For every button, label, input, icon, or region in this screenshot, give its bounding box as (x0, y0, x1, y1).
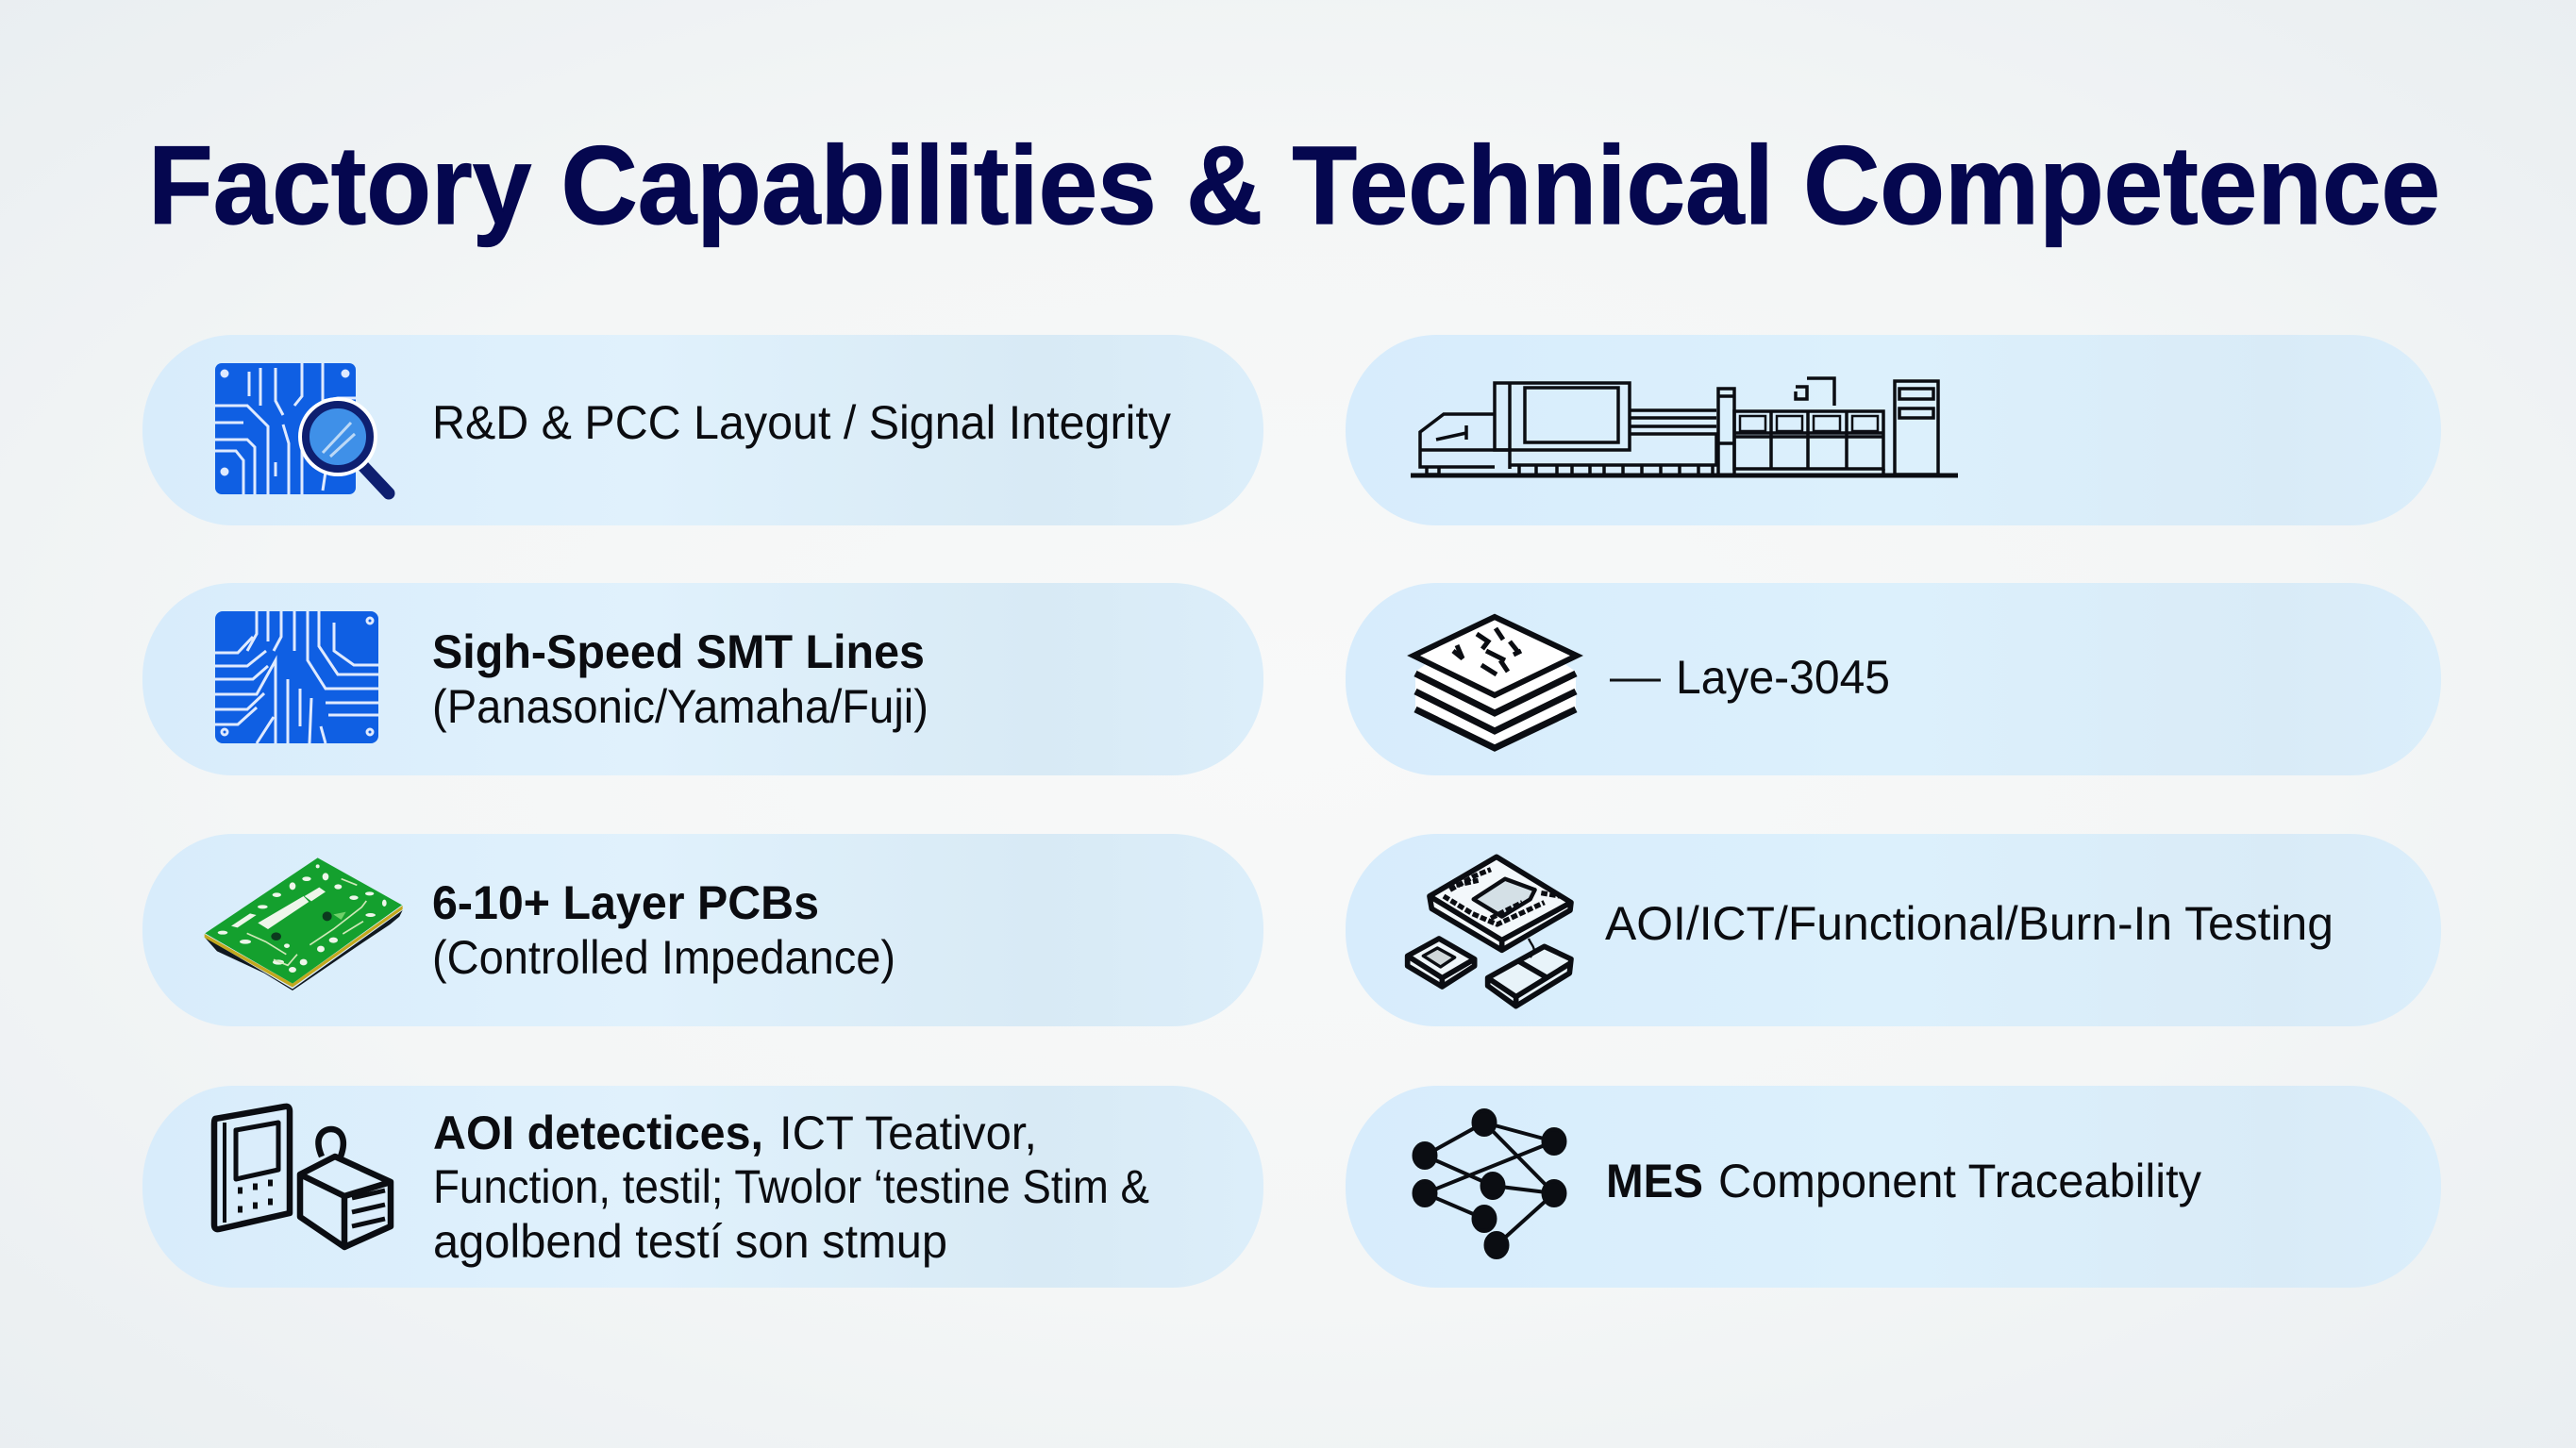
icon: circuit board (215, 611, 378, 743)
text: MES label: MES (1606, 1155, 1703, 1207)
text: SMT brands: (Panasonic/Yamaha/Fuji) (432, 680, 928, 733)
text: SMT heading: Sigh-Speed SMT Lines (432, 625, 925, 678)
text: AOI line 3: agolbend testí son stmup (433, 1215, 947, 1268)
panel: SMT lines (142, 583, 1263, 775)
text: AOI line 1: AOI detectices, (433, 1107, 763, 1159)
text: PCB heading: 6-10+ Layer PCBs (432, 876, 819, 929)
panel: layer stack (1346, 583, 2441, 775)
icon: circuit board with magnifier (215, 363, 389, 494)
text: AOI line 1: ICT Teativor, (779, 1107, 1037, 1159)
icon: green PCB (205, 857, 403, 990)
panel: AOI detection (142, 1086, 1263, 1288)
panel: MES traceability (1346, 1086, 2441, 1288)
panel: testing (1346, 834, 2441, 1026)
text: MES label: Component Traceability (1718, 1155, 2201, 1207)
text: R&D line: R&D & PCC Layout / Signal Integrity (432, 396, 1171, 449)
dash before label (1610, 679, 1661, 681)
icon: factory line (1411, 378, 1958, 475)
text: PCB note: (Controlled Impedance) (432, 931, 895, 984)
text: layer label: Laye-3045 (1676, 651, 1890, 704)
panel: multilayer PCBs (142, 834, 1263, 1026)
icon: tablet and box (214, 1107, 391, 1247)
icon: chips (1408, 857, 1571, 1007)
panel: production line (1346, 335, 2441, 525)
icon: node network (1413, 1110, 1564, 1257)
title: Factory Capabilities & Technical Competence (148, 124, 2440, 248)
panel: R&D and PCB layout (142, 335, 1263, 525)
text: AOI line 2: Function, testil; Twolor ‘testine Stim & (433, 1160, 1149, 1213)
icon: stacked layers (1413, 615, 1577, 748)
text: testing label: AOI/ICT/Functional/Burn-In Testing (1605, 897, 2333, 950)
